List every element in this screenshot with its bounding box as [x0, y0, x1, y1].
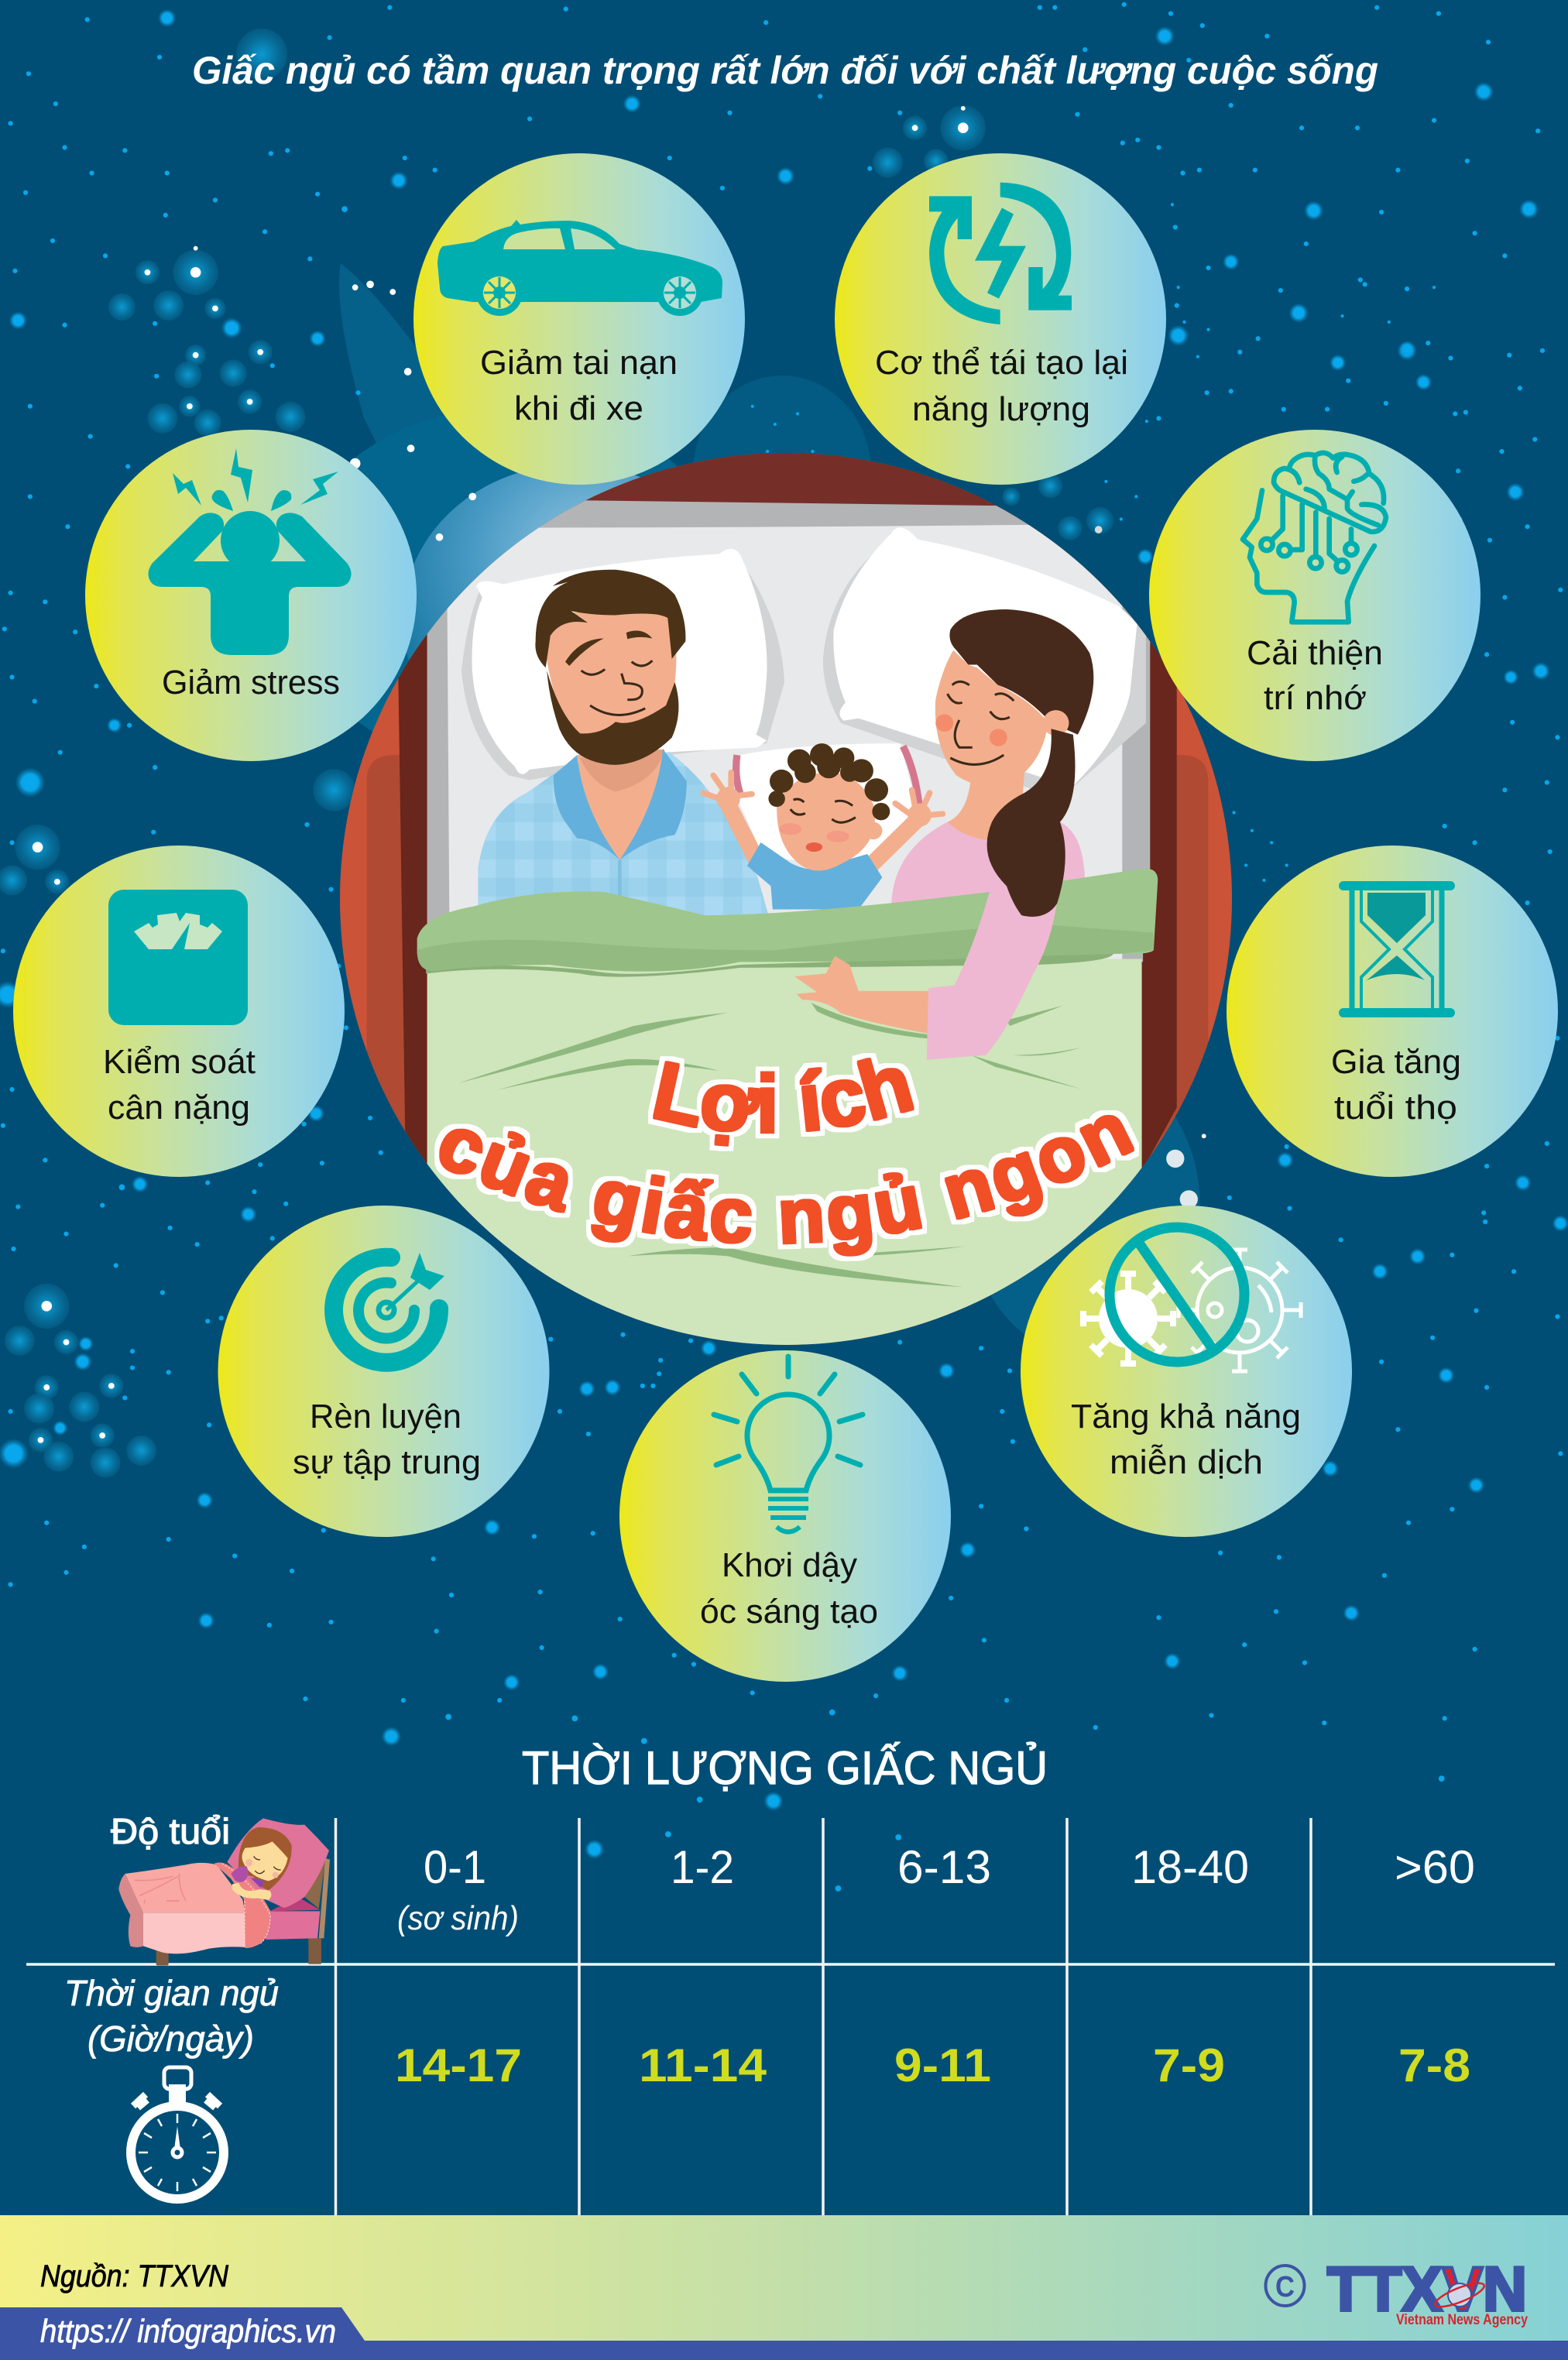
sleep hours values: 9-11 [894, 2039, 991, 2091]
benefit: Kiểm soát cân nặng [13, 846, 345, 1177]
benefit: Gia tăng tuổi thọ [1227, 846, 1558, 1177]
logo: TTXVN: Vietnam News Agency [1396, 2312, 1528, 2328]
starfield [0, 5, 1568, 1888]
icon: light bulb [714, 1357, 863, 1532]
blanket and sheet [417, 869, 1158, 1363]
icon: target with arrow [334, 1253, 444, 1363]
pillow: father [461, 549, 784, 780]
benefit: Tăng khả năng miễn dịch [1021, 1206, 1352, 1537]
benefit: Cơ thể tái tạo lại năng lượng: Cơ thể tái tạo lại [875, 344, 1128, 382]
pillow: mother [823, 527, 1146, 799]
logo: TTXVN: C [1275, 2271, 1295, 2303]
icon: brain head [1243, 453, 1386, 622]
benefit: Giảm stress [85, 430, 417, 761]
icon: weighing scale [108, 890, 248, 1025]
child [703, 743, 942, 910]
icon: blocked virus [1083, 1227, 1301, 1371]
central illustration: family sleeping in bed [325, 449, 1254, 1363]
curtains [325, 449, 1254, 1363]
benefit: Gia tăng tuổi thọ: tuổi thọ [1334, 1089, 1457, 1127]
label: age: Độ tuổi [111, 1811, 230, 1851]
sleep hours values: 14-17 [395, 2039, 522, 2091]
benefit: Rèn luyện sự tập trung: sự tập trung [293, 1443, 481, 1481]
age values: >60 [1395, 1841, 1475, 1893]
light beams behind bed [286, 263, 1200, 1355]
age values: 1-2 [671, 1841, 734, 1893]
icon: energy cycle [929, 183, 1072, 324]
sleep duration table [26, 1811, 1555, 2215]
label: sleep time: Thời gian ngủ [64, 1973, 279, 2013]
benefit: Kiểm soát cân nặng: Kiểm soát [103, 1043, 256, 1081]
sleep hours values [395, 2039, 1470, 2091]
headboard wall [427, 449, 1150, 962]
benefit: Giảm stress: Giảm stress [162, 664, 340, 701]
age values: 18-40 [1131, 1841, 1249, 1893]
benefit: Cải thiện trí nhớ: trí nhớ [1264, 679, 1367, 717]
icon: child sleeping in bed [118, 1818, 330, 1965]
benefit: Khơi dậy óc sáng tạo: Khơi dậy [722, 1546, 857, 1584]
note: newborn: (sơ sinh) [397, 1899, 519, 1937]
icon: car [437, 220, 722, 316]
age values: 6-13 [897, 1841, 991, 1893]
source: Nguồn: TTXVN [40, 2259, 228, 2293]
benefit: Cơ thể tái tạo lại năng lượng [835, 153, 1166, 485]
icon: stopwatch [126, 2067, 228, 2204]
benefit: Khơi dậy óc sáng tạo: óc sáng tạo [700, 1593, 878, 1631]
glowing bubbles [0, 9, 1568, 1859]
white star points [33, 106, 1206, 1443]
star dots [3, 5, 1560, 1888]
footer band [0, 2215, 1568, 2360]
benefit: Rèn luyện sự tập trung: Rèn luyện [310, 1398, 461, 1436]
benefit: Gia tăng tuổi thọ: Gia tăng [1331, 1043, 1461, 1081]
benefit: Giảm tai nạn khi đi xe [413, 153, 745, 485]
benefit: Tăng khả năng miễn dịch: miễn dịch [1110, 1443, 1263, 1481]
sleep hours values: 7-8 [1398, 2039, 1470, 2091]
benefit: Giảm tai nạn khi đi xe: Giảm tai nạn [480, 344, 678, 382]
benefit: Giảm tai nạn khi đi xe: khi đi xe [514, 389, 643, 427]
benefit: Tăng khả năng miễn dịch: Tăng khả năng [1071, 1398, 1301, 1436]
heading: Lợi ích của giấc ngủ ngon: của giấc ngủ ngon [434, 1110, 1139, 1261]
icon: hourglass [1339, 881, 1455, 1017]
age values: 0-1 [424, 1841, 486, 1893]
logo: TTXVN: TTXVN [1327, 2255, 1527, 2324]
sleep hours values: 11-14 [639, 2039, 767, 2091]
website url: https:// infographics.vn [40, 2313, 336, 2349]
heading: Lợi ích của giấc ngủ ngon: Lợi ích [648, 1053, 919, 1151]
footer url bar [0, 2307, 1568, 2360]
icon: stressed person [148, 448, 352, 655]
benefit: Kiểm soát cân nặng: cân nặng [108, 1089, 250, 1127]
benefit: Rèn luyện sự tập trung [218, 1206, 550, 1537]
table grid [26, 1818, 1555, 2215]
mother's arm and hair [794, 729, 1076, 1060]
benefit: Cơ thể tái tạo lại năng lượng: năng lượng [912, 390, 1090, 428]
mother [891, 609, 1093, 921]
age values [424, 1841, 1475, 1893]
title: Giấc ngủ có tầm quan trọng rất lớn đối với chất lượng cuộc sống [192, 49, 1378, 92]
footer [0, 2215, 1568, 2360]
heading: sleep duration: THỜI LƯỢNG GIẤC NGỦ [522, 1742, 1048, 1794]
benefit: Cải thiện trí nhớ [1149, 430, 1481, 761]
label: sleep time [64, 1973, 279, 2059]
benefit: Khơi dậy óc sáng tạo [619, 1350, 951, 1682]
benefit: Cải thiện trí nhớ: Cải thiện [1247, 634, 1383, 672]
label: sleep time: (Giờ/ngày) [87, 2019, 254, 2059]
sleep hours values: 7-9 [1153, 2039, 1225, 2091]
father [478, 570, 768, 915]
